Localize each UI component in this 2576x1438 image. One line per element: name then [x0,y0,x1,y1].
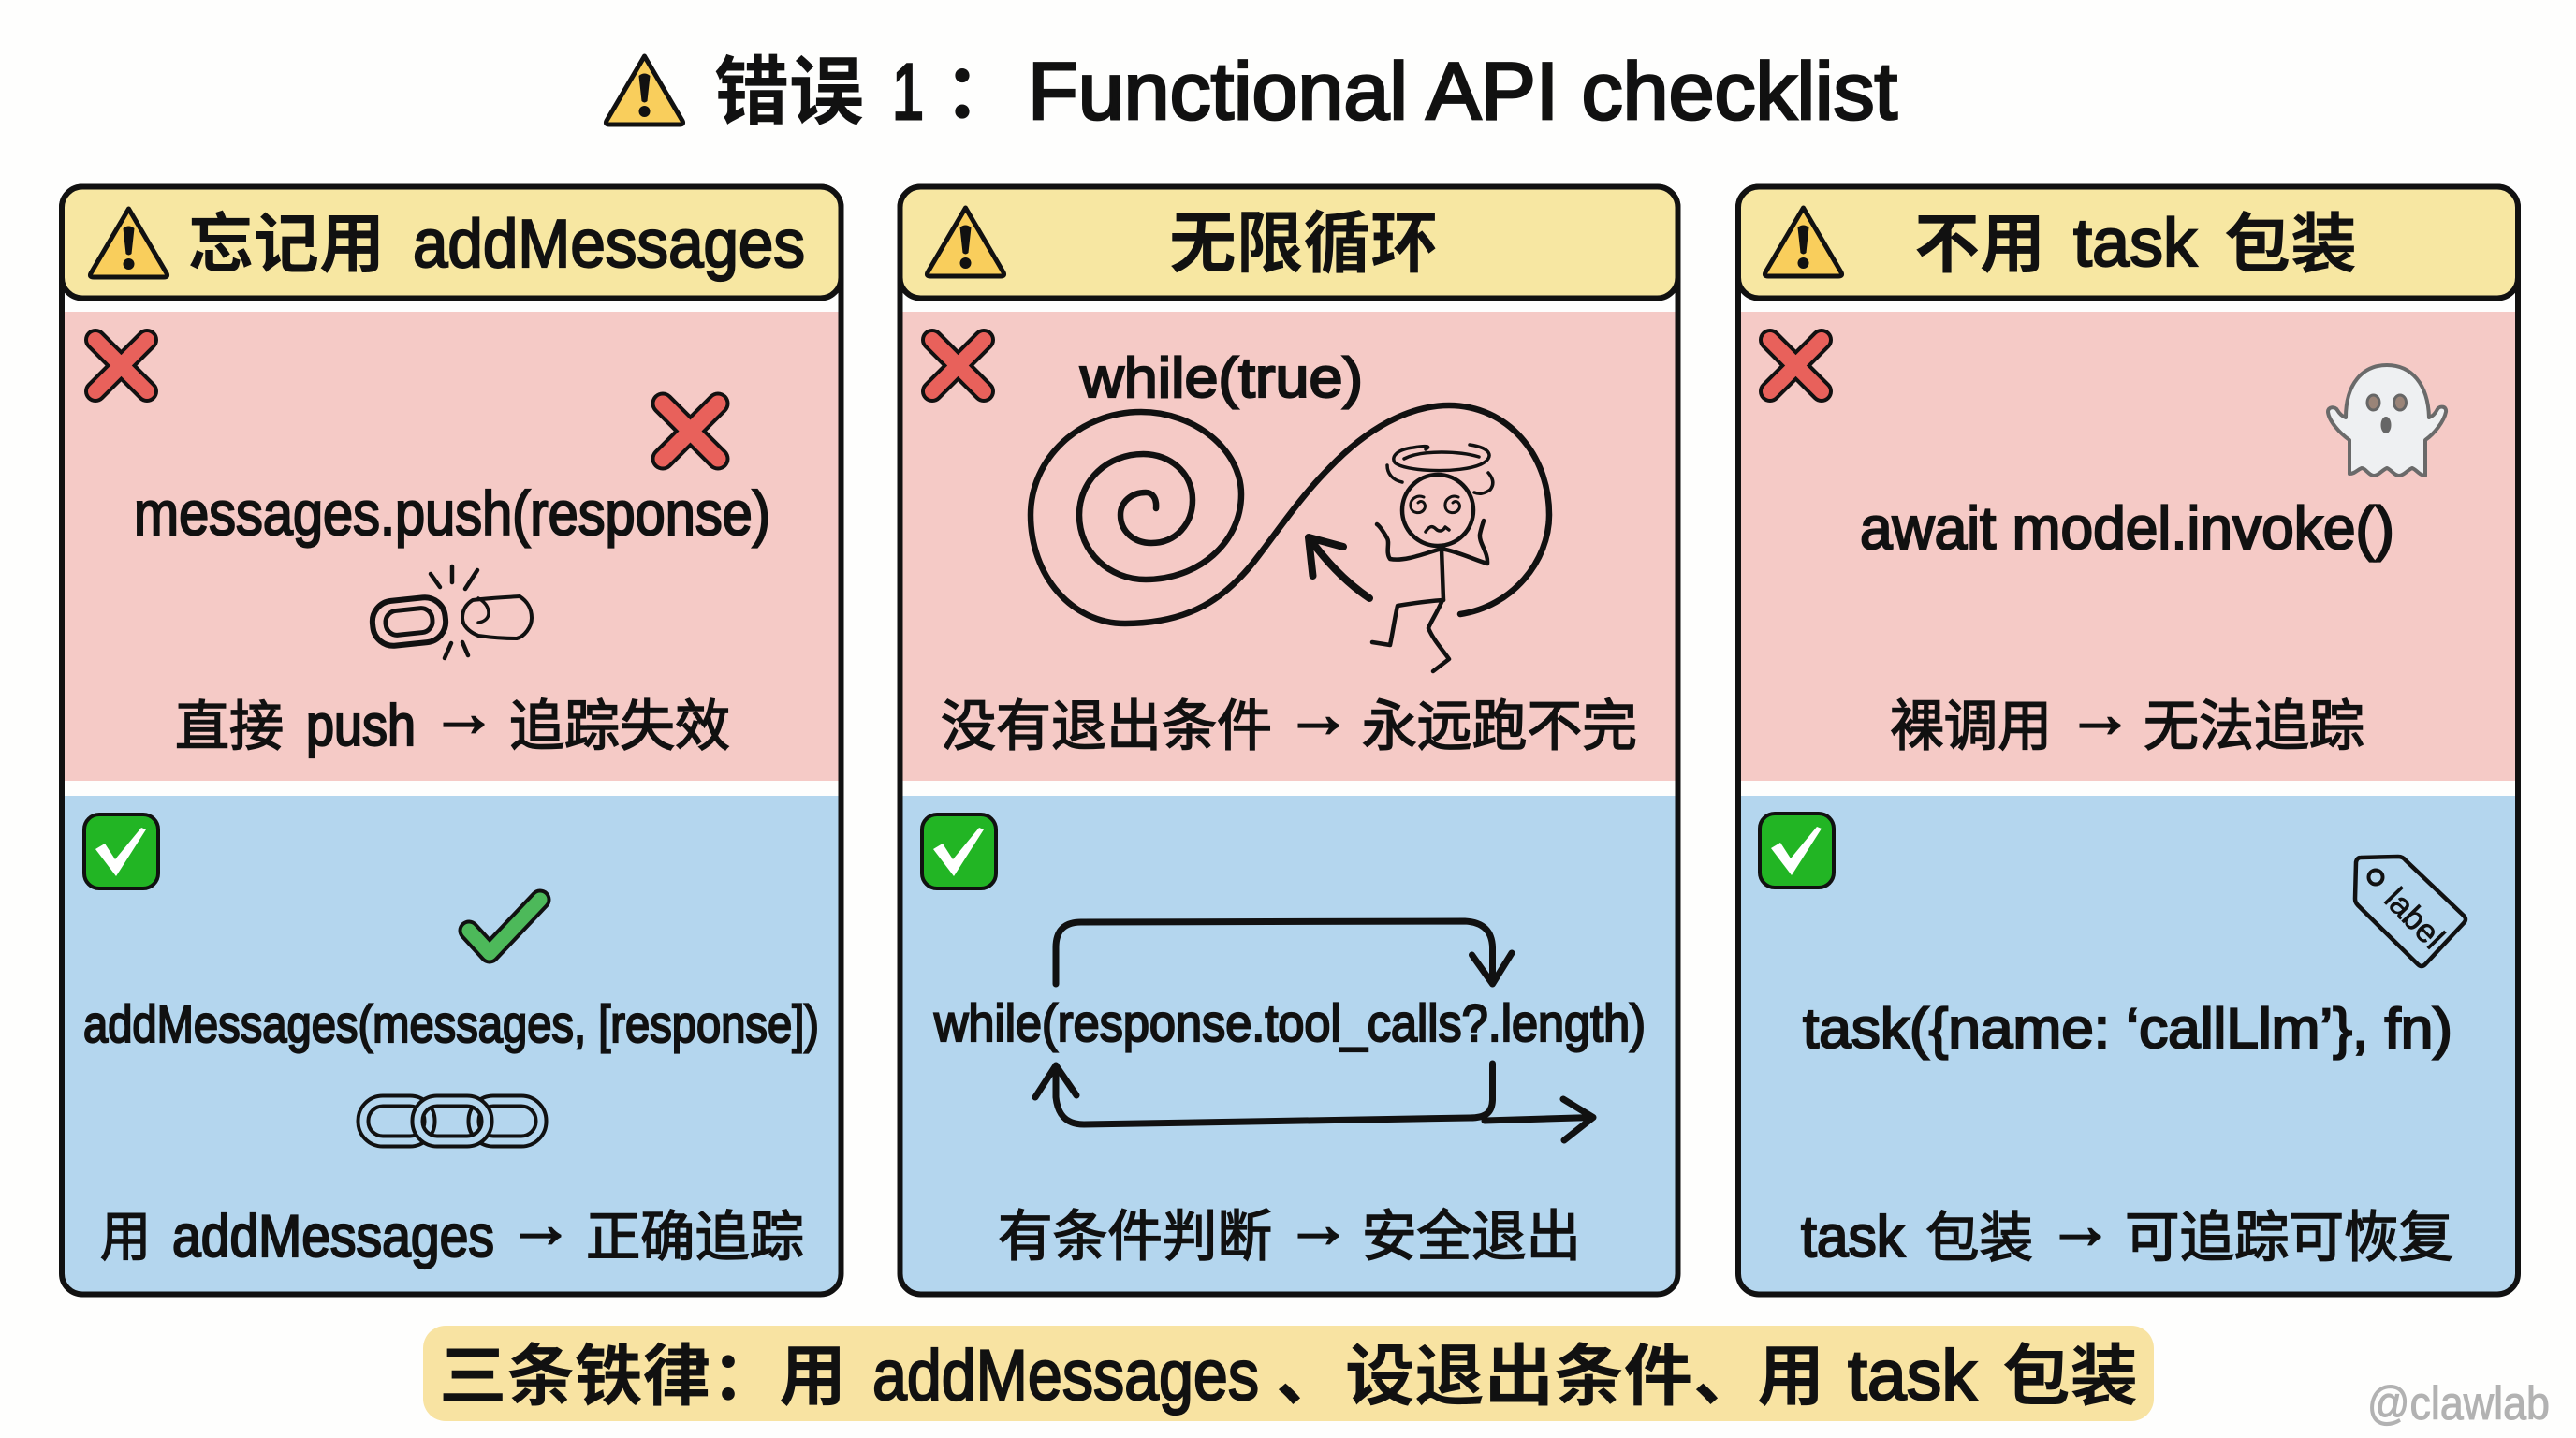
title [606,47,1897,137]
correct section: addMessages [65,796,839,1292]
caption: no exit never ends: → [1285,678,1352,752]
code: bare invoke: await model.invoke() [1860,494,2394,562]
arrow: loop bottom [1035,1064,1492,1124]
panel border [900,187,1677,1294]
code: while with condition: while(response.tool_calls?.length) [933,993,1646,1052]
panel header: 不用 [1914,208,2045,281]
summary banner: 用 [779,1340,846,1415]
caption: task traceable recoverable: 包装 [1925,1208,2033,1269]
panel header: 包装 [2224,208,2357,281]
summary banner [423,1326,2154,1421]
caption: push breaks tracing: → [431,677,497,751]
icon: label tag: label [2378,881,2452,956]
wrong section: while true [902,312,1676,781]
panel background [1738,187,2518,1294]
panel: no task wrapper [1738,187,2518,1294]
panel header [1738,187,2518,298]
summary banner: ： [711,1340,779,1415]
caption: addMessages tracks correctly [100,1188,804,1269]
icon: warning [927,208,1004,276]
title: ： [944,51,1018,134]
caption: bare call untraceable [1890,678,2364,757]
caption: condition exits safely [998,1188,1581,1268]
icon: label tag [2355,857,2466,966]
caption: addMessages tracks correctly: addMessages [172,1204,494,1269]
correct section: task wrapper [1741,796,2515,1292]
arrow: looping back [1309,537,1369,598]
caption: push breaks tracing: push [306,694,416,758]
caption: task traceable recoverable: task [1801,1205,1906,1269]
caption: push breaks tracing [175,677,730,758]
code: task wrapper: task({name: ‘callLlm’}, fn) [1803,997,2452,1060]
icon: red cross [1770,340,1822,391]
icon: intact chain [363,1101,541,1141]
wrong section: bare invoke [1741,312,2515,781]
arrow: safe exit [1485,1099,1593,1140]
caption: bare call untraceable: 裸调用 [1890,696,2052,757]
panel background [900,187,1677,1294]
caption: condition exits safely: 安全退出 [1362,1206,1581,1268]
icon: ghost [2328,365,2446,476]
panel border [1738,187,2518,1294]
icon: green check box [922,814,996,888]
code: messages.push: messages.push(response) [134,478,770,548]
caption: task traceable recoverable: → [2047,1189,2114,1263]
title: 1 [892,48,924,136]
watermark: @clawlab [2367,1377,2550,1430]
code: while true: while(true) [1079,346,1363,409]
correct section: conditional loop [902,796,1676,1292]
caption: addMessages tracks correctly: → [507,1188,574,1262]
icon: broken chain [371,566,532,658]
caption: no exit never ends [941,678,1637,757]
caption: bare call untraceable: 无法追踪 [2144,696,2364,757]
summary banner: 用 [1757,1340,1824,1415]
arrow: loop top [1056,921,1512,984]
summary banner: 包装 [2002,1340,2138,1415]
wrong section: push [65,312,839,781]
icon: title warning [606,56,683,125]
panel header: task [2073,206,2198,281]
caption: addMessages tracks correctly: 正确追踪 [586,1207,804,1268]
summary banner: task [1848,1336,1978,1416]
icon: dizzy stick figure [1372,445,1493,671]
icon: warning [90,209,168,277]
caption: bare call untraceable: → [2067,678,2133,752]
caption: no exit never ends: 没有退出条件 [941,696,1272,757]
caption: condition exits safely: 有条件判断 [998,1206,1272,1268]
panel background [62,187,841,1294]
caption: push breaks tracing: 直接 [175,697,284,757]
panel header [62,187,841,298]
icon: red cross [932,340,984,391]
summary banner: 、 [1276,1340,1343,1415]
caption: condition exits safely: → [1285,1188,1352,1262]
caption: push breaks tracing: 追踪失效 [509,696,730,757]
panel header: 忘记用 [188,208,385,281]
summary banner: 设退出条件 [1345,1340,1693,1415]
summary banner: 、 [1693,1340,1761,1415]
summary banner: 三条铁律 [439,1340,710,1415]
icon: green check box [84,814,158,888]
panel border [62,187,841,1294]
icon: endless spiral [1031,405,1549,624]
summary banner: addMessages [872,1336,1259,1416]
icon: warning [1764,208,1842,276]
panel header: 无限循环 [1169,207,1438,282]
title: 错误 [714,51,864,134]
caption: task traceable recoverable [1801,1189,2453,1269]
panel header [900,187,1677,298]
caption: addMessages tracks correctly: 用 [100,1207,151,1268]
panel header: addMessages [413,207,805,282]
code: addMessages call: addMessages(messages, [response]) [83,994,819,1053]
icon: green check mark [469,900,540,953]
panel: infinite loop [900,187,1677,1294]
title: Functional API checklist [1028,47,1897,137]
icon: red cross large [663,404,718,459]
icon: red cross [95,340,147,391]
icon: green check box [1760,814,1834,888]
caption: task traceable recoverable: 可追踪可恢复 [2125,1207,2453,1269]
caption: no exit never ends: 永远跑不完 [1362,696,1637,757]
panel: forgot addMessages [62,187,841,1294]
